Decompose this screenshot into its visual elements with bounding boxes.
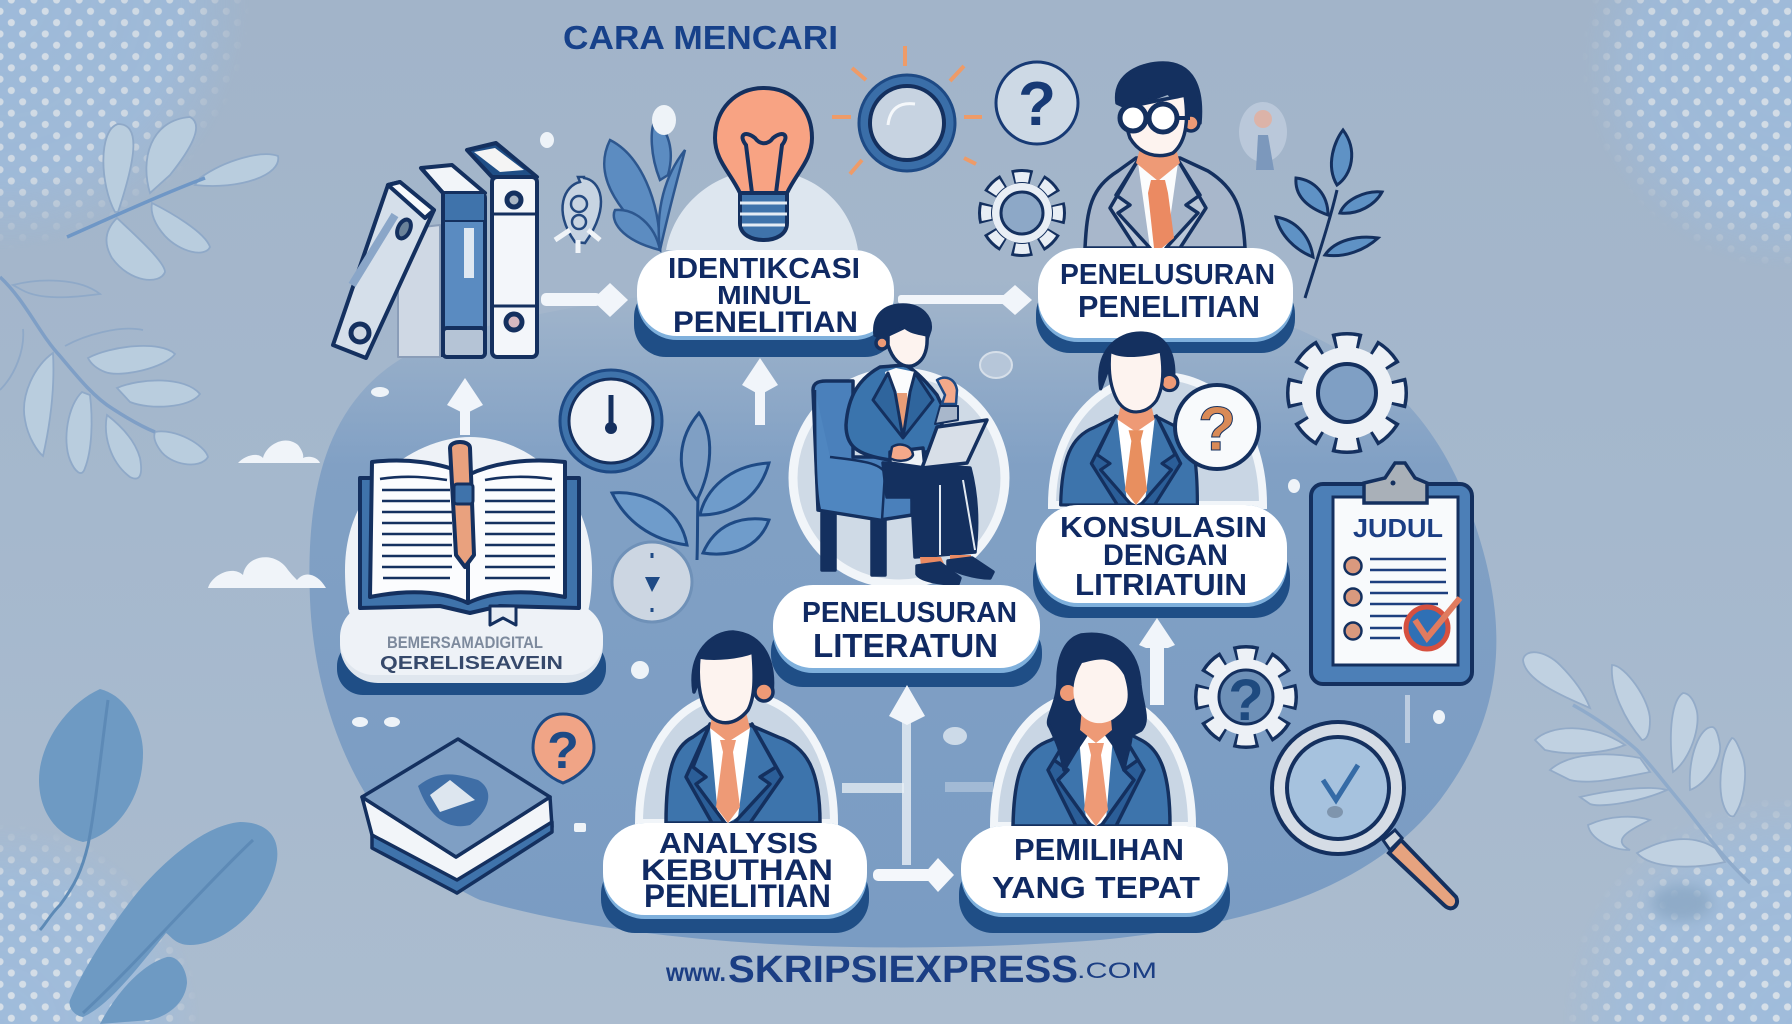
panel: book halo and label: QERELISEAVEIN — [380, 653, 563, 673]
title: CARA MENCARI — [563, 19, 838, 56]
decorative white specks — [352, 105, 1445, 832]
panel: book halo and label: BEMERSAMADIGITAL — [387, 633, 543, 652]
decorative leaves bottom left — [39, 689, 277, 1024]
panel: analysis label — [601, 823, 869, 933]
arrow: up to konsultasi — [1139, 618, 1175, 705]
icon: speech bubble question: ? — [1198, 395, 1236, 464]
panel: analysis label: PENELITIAN — [644, 878, 831, 914]
halo behind selector — [994, 694, 1192, 826]
decorative branch left — [0, 277, 208, 479]
icon: lens ring with rays — [832, 46, 982, 174]
icon: leaning book bottom — [362, 739, 552, 893]
panel: analysis label: ANALYSIS — [659, 828, 818, 860]
panel: pemilihan label: YANG TEPAT — [992, 870, 1200, 905]
icon: small gear — [986, 177, 1058, 249]
icon: question mark circle — [996, 62, 1078, 144]
figure: consultant — [1061, 333, 1197, 505]
icon: plant right — [1276, 130, 1382, 298]
panel: penelusuran penelitian label — [1036, 248, 1295, 353]
icon: leaves beside bulb — [604, 120, 685, 250]
footer website: www. — [665, 959, 726, 987]
icon: clock two — [612, 542, 692, 622]
icon: faint cluster — [1239, 102, 1287, 170]
panel: konsultasi label: KONSULASIN — [1060, 512, 1267, 544]
clouds — [208, 440, 326, 588]
panel: identification label: IDENTIKCASI — [668, 253, 860, 285]
icon: faint pebble — [980, 352, 1012, 378]
shadow spot bottom right — [1652, 885, 1712, 921]
icon: question mark circle: ? — [1018, 70, 1056, 139]
figure: analyst — [666, 632, 820, 823]
panel: penelusuran penelitian label: PENELITIAN — [1078, 289, 1260, 324]
figure: woman selecting — [1013, 634, 1170, 826]
icon: open book with pencil — [360, 442, 579, 625]
arrow: vertical branch between analysis and choice — [842, 685, 993, 865]
icon: speech bubble question — [1175, 385, 1259, 469]
figure: man with glasses — [1085, 63, 1245, 248]
halo behind consultant — [1052, 376, 1263, 505]
arrow: up left — [447, 378, 483, 435]
figure: seated man on chair — [813, 305, 993, 584]
icon: plant centre — [612, 413, 769, 560]
panel: identification label: MINUL — [717, 280, 811, 310]
icon: light bulb — [715, 88, 812, 240]
panel: pemilihan label — [959, 826, 1230, 933]
panel: konsultasi label: DENGAN — [1103, 539, 1228, 572]
panel: penelusuran literatun label: LITERATUN — [813, 627, 998, 664]
icon: big gear — [1297, 343, 1397, 443]
panel: konsultasi label: LITRIATUIN — [1075, 567, 1247, 602]
panel: konsultasi label — [1033, 505, 1290, 618]
panel: analysis label: KEBUTHAN — [641, 854, 833, 887]
central blue blob — [309, 278, 1496, 947]
icon: gear with question mark: ? — [1228, 668, 1264, 733]
icon: clock one — [560, 370, 662, 472]
panel: penelusuran literatun label: PENELUSURAN — [802, 597, 1017, 629]
panel: pemilihan label: PEMILIHAN — [1014, 832, 1184, 867]
halo behind bulb — [666, 170, 858, 250]
icon: stack of books — [333, 143, 537, 358]
icon: clipboard with checklist: JUDUL — [1353, 513, 1443, 543]
icon: gear with question mark — [1204, 655, 1288, 739]
icon: question pin: ? — [547, 722, 579, 780]
footer website — [665, 949, 1157, 991]
panel: identification label — [634, 250, 897, 357]
panel: book halo and label — [337, 437, 606, 695]
arrow: books to identification — [541, 283, 628, 317]
panel: penelusuran literatun label — [771, 585, 1042, 687]
arrow: identification to tracing — [898, 285, 1032, 315]
footer website: SKRIPSIEXPRESS — [728, 949, 1078, 991]
icon: question pin — [533, 714, 594, 783]
halo behind seated figure — [793, 372, 1005, 584]
arrow: up centre — [742, 358, 778, 425]
panel: penelusuran penelitian label: PENELUSURAN — [1060, 259, 1275, 291]
arrow: analysis to choice — [873, 858, 954, 892]
decorative branch bottom right — [1523, 652, 1750, 883]
icon: magnifying glass — [1272, 722, 1457, 908]
icon: small emblem — [555, 177, 601, 253]
panel: identification label: PENELITIAN — [673, 306, 858, 339]
footer website: .COM — [1077, 958, 1157, 983]
icon: clipboard with checklist — [1311, 463, 1472, 684]
decorative branch top left — [67, 117, 278, 280]
halo behind analyst — [639, 694, 834, 823]
